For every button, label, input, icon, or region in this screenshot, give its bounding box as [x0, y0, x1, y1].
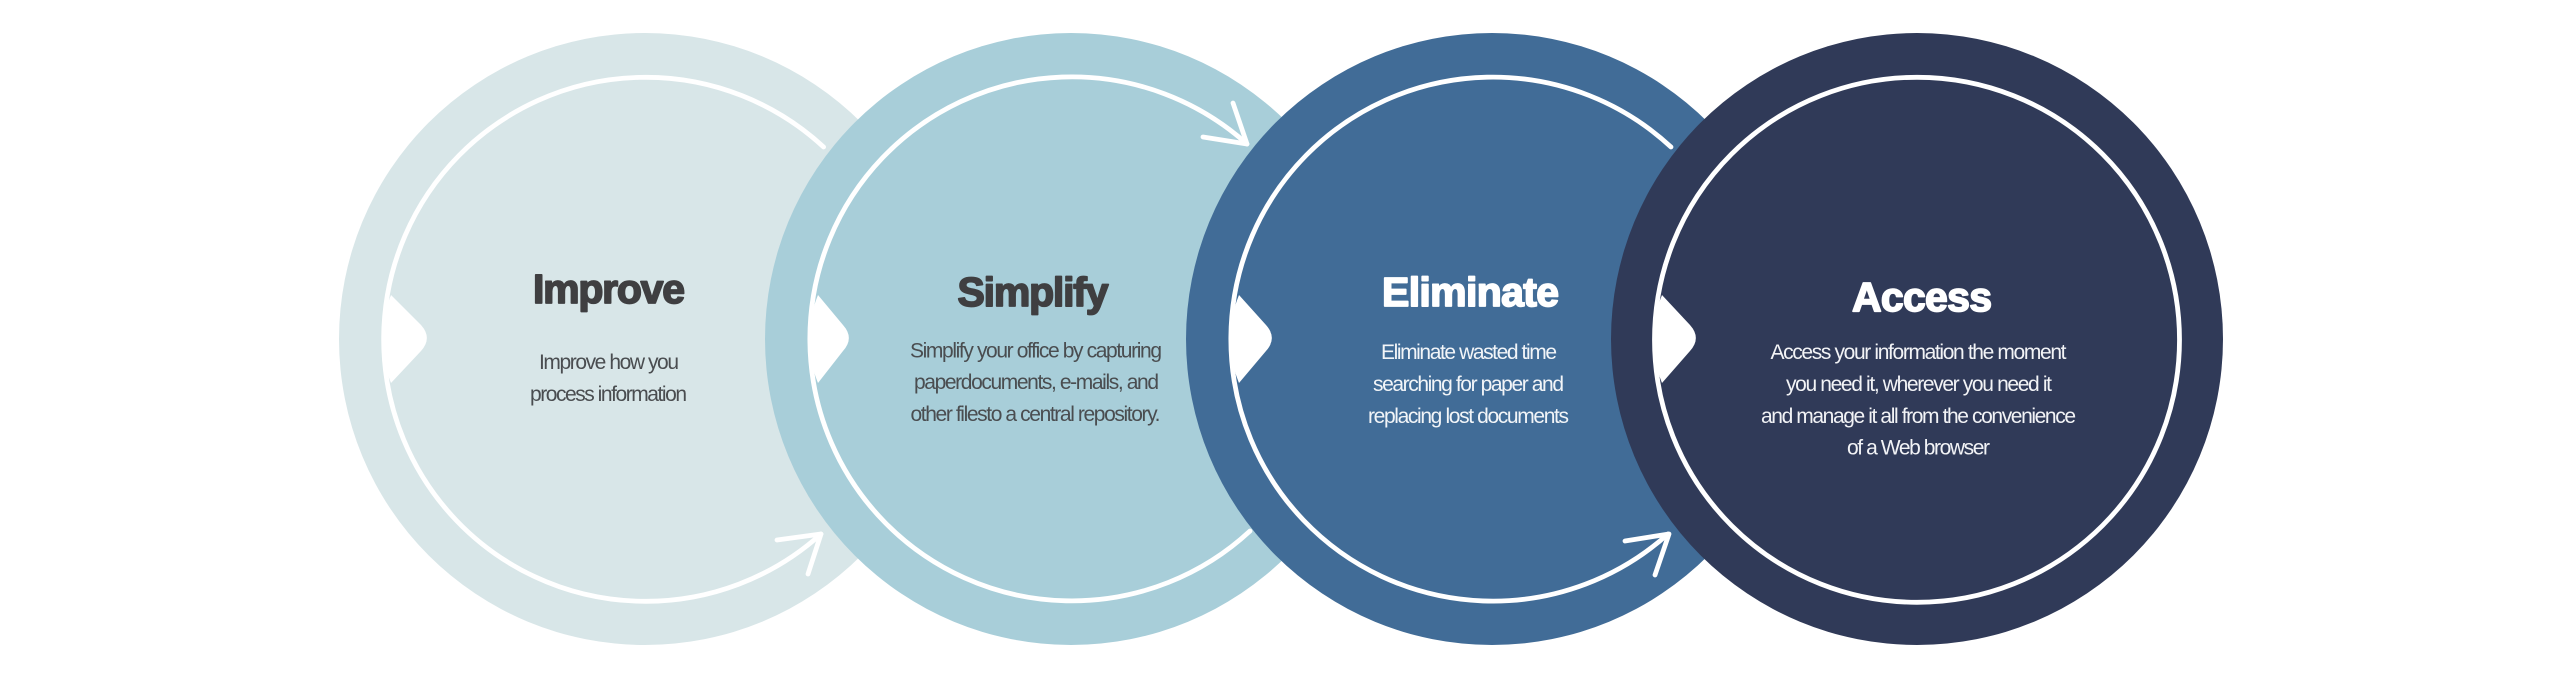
text: Eliminate description — [1368, 341, 1569, 428]
text: Improve description — [530, 351, 687, 406]
heading: Improve: Improve — [533, 266, 685, 312]
text: Access description: Access your information the moment — [1770, 341, 2067, 364]
text: Simplify description: Simplify your office by capturing — [910, 340, 1162, 362]
circle: Eliminate background — [1186, 33, 1798, 645]
panel: Simplify — [765, 33, 1377, 645]
icon: Improve notch — [382, 295, 427, 383]
text: Access description: of a Web browser — [1847, 436, 1990, 460]
text: Improve description: Improve how you — [539, 351, 679, 374]
circle: Improve background — [339, 33, 951, 645]
text: Access description: and manage it all from the convenience — [1761, 405, 2076, 428]
icon: Eliminate notch — [1230, 295, 1272, 383]
text: Improve description: process information — [530, 383, 687, 406]
text: Simplify description — [910, 340, 1162, 426]
ring arrow: Improve — [384, 77, 824, 601]
text: Access description: you need it, wherever you need it — [1786, 373, 2052, 396]
circle: Access background — [1611, 33, 2223, 645]
ring: Access — [1654, 77, 2180, 602]
text: Simplify description: paperdocuments, e-mails, and — [914, 371, 1159, 394]
ring arrow: Simplify — [810, 77, 1250, 601]
heading: Eliminate: Eliminate — [1382, 269, 1559, 315]
panel: Improve — [339, 33, 951, 645]
panel: Access — [1611, 33, 2223, 645]
ring arrow: Eliminate — [1231, 77, 1671, 601]
icon: Access notch — [1653, 295, 1696, 383]
text: Eliminate description: searching for paper and — [1373, 373, 1564, 396]
text: Simplify description: other filesto a central repository. — [910, 403, 1160, 426]
panel: Eliminate — [1186, 33, 1798, 645]
icon: Simplify notch — [809, 295, 849, 383]
text: Access description — [1761, 341, 2076, 460]
text: Eliminate description: replacing lost documents — [1368, 405, 1569, 428]
heading: Access: Access — [1852, 274, 1992, 320]
text: Eliminate description: Eliminate wasted time — [1381, 341, 1557, 364]
heading: Simplify: Simplify — [958, 269, 1109, 315]
circle: Simplify background — [765, 33, 1377, 645]
